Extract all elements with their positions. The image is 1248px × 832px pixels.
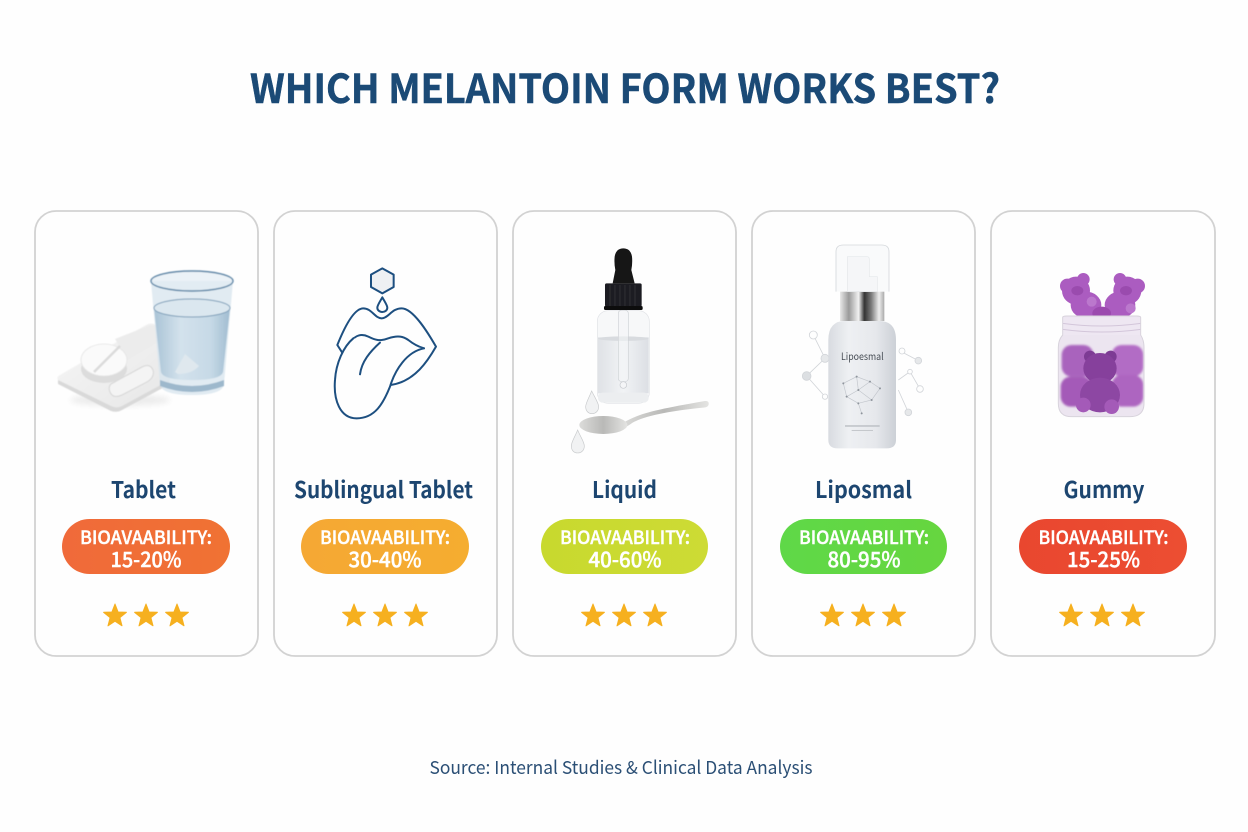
badge: gummy bioavailability: BIOAVAABILITY: [1038, 524, 1168, 550]
source note: Source: Internal Studies & Clinical Data Analysis [430, 754, 812, 780]
badge: liquid bioavailability [541, 519, 708, 574]
badge: sublingual bioavailability: BIOAVAABILITY: [320, 524, 450, 550]
title: WHICH MELANTOIN FORM WORKS BEST? [250, 57, 1000, 115]
icon: liposomal pump bottle with molecules [802, 245, 923, 448]
rating: sublingual stars [343, 604, 427, 626]
rating: liquid stars [582, 604, 666, 626]
panel: gummy [991, 211, 1215, 656]
badge: tablet bioavailability: BIOAVAABILITY: [80, 524, 212, 550]
badge: gummy bioavailability: 15-25% [1067, 544, 1140, 574]
panel: sublingual tablet [274, 211, 497, 656]
badge: tablet bioavailability: 15-20% [110, 544, 182, 574]
badge: tablet bioavailability [62, 519, 230, 574]
panel: tablet [35, 211, 258, 656]
icon: tablet blister and glass of water [57, 271, 233, 412]
label: liposomal: Liposmal [815, 471, 912, 505]
label: gummy: Gummy [1064, 471, 1144, 505]
badge: sublingual bioavailability: 30-40% [348, 544, 422, 574]
panel: liposomal [752, 211, 975, 656]
icon: jar of purple gummy bears [1058, 273, 1145, 417]
badge: gummy bioavailability [1019, 519, 1187, 574]
badge: sublingual bioavailability [301, 519, 469, 574]
label: liquid: Liquid [592, 471, 657, 505]
rating: tablet stars [104, 604, 188, 626]
badge: liquid bioavailability: 40-60% [588, 544, 662, 574]
icon: dropper bottle with spoon [571, 248, 709, 453]
panel: liquid [513, 211, 736, 656]
badge: liposomal bioavailability [780, 519, 947, 574]
rating: liposomal stars [821, 604, 905, 626]
badge: liposomal bioavailability: BIOAVAABILITY: [799, 524, 929, 550]
label: tablet: Tablet [111, 471, 176, 505]
rating: gummy stars [1060, 604, 1144, 626]
badge: liposomal bioavailability: 80-95% [828, 544, 900, 574]
icon: liposomal pump bottle with molecules: Lipoesmal [841, 348, 884, 363]
badge: liquid bioavailability: BIOAVAABILITY: [560, 524, 690, 550]
icon: tongue with hexagon and drop [335, 268, 436, 418]
label: sublingual tablet: Sublingual Tablet [294, 471, 473, 505]
